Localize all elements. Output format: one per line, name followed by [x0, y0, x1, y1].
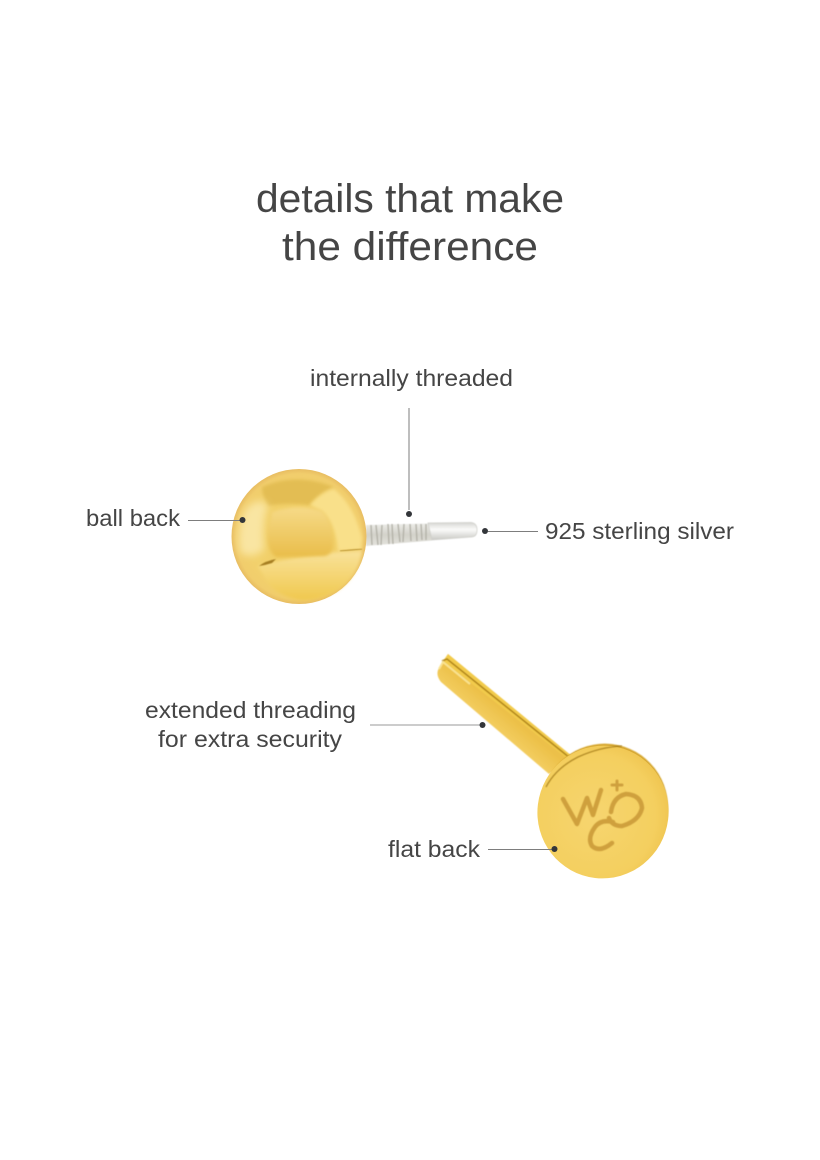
label: flat back: flat back	[388, 836, 480, 862]
gold post	[437, 654, 573, 774]
title: the difference	[282, 225, 538, 269]
gold ball	[232, 469, 366, 604]
logo engraving	[563, 781, 642, 849]
label: extended threading	[145, 697, 486, 752]
silver threaded post	[366, 522, 477, 546]
title: details that make	[256, 177, 564, 221]
label: ball back	[86, 505, 246, 531]
label: flat back	[388, 836, 558, 862]
label: extended threading: for extra security	[158, 726, 342, 752]
label: 925 sterling silver: 925 sterling silver	[545, 518, 734, 544]
label: internally threaded	[310, 365, 513, 517]
label: extended threading: extended threading	[145, 697, 356, 723]
product photo: ball back stud	[232, 469, 477, 604]
label: internally threaded: internally threaded	[310, 365, 513, 391]
gold disc	[520, 727, 686, 895]
product photo: flat back stud	[437, 654, 686, 895]
reflections	[262, 480, 334, 506]
label: ball back: ball back	[86, 505, 180, 531]
title	[256, 177, 564, 269]
